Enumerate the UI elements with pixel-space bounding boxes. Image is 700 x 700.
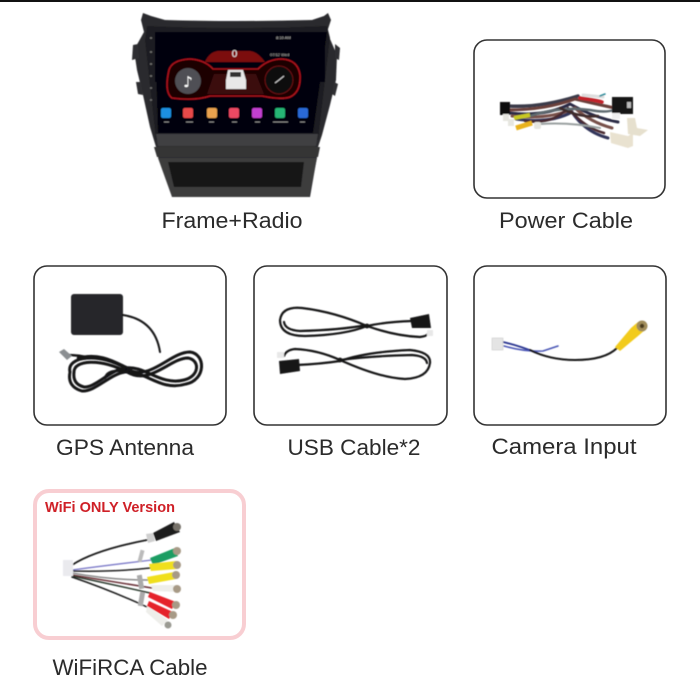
panel: USB cables: [254, 266, 447, 460]
USB connectors: [410, 314, 431, 328]
head unit image: [132, 13, 340, 197]
car icon: [226, 70, 246, 89]
panel: GPS antenna: [34, 266, 226, 460]
label: WiFi RCA cable: WiFiRCA Cable: [52, 655, 208, 680]
panel: frame and radio: [132, 13, 340, 233]
label: power cable: Power Cable: [499, 208, 633, 233]
white connectors: [610, 132, 633, 148]
top status bar text: 8:10 AM: [276, 35, 291, 40]
right black connector: [612, 97, 633, 114]
audio jack: [146, 533, 155, 543]
label: GPS antenna: GPS Antenna: [56, 435, 195, 460]
camera cable image: [492, 320, 648, 360]
top edge bar: [0, 0, 700, 2]
panel: WiFi RCA cable: [35, 491, 244, 680]
RCA plugs: [150, 548, 178, 565]
wiring harness image: [500, 94, 648, 148]
panel: power cable: [474, 40, 665, 233]
label: USB cable x2: USB Cable*2: [288, 435, 420, 460]
speed readout: 07/12 Wed: [270, 52, 289, 57]
antenna plug: [59, 349, 72, 360]
white connector: [492, 338, 503, 350]
side button dots: [150, 38, 152, 100]
panel: camera input: [474, 266, 666, 459]
screen: [150, 32, 327, 133]
yellow RCA plug: [615, 322, 645, 351]
WiFi only badge text: WiFi ONLY Version: [45, 499, 175, 516]
RCA plugs: [514, 115, 530, 118]
dashboard ring: ♪: [183, 73, 193, 91]
left black connector: [500, 102, 510, 115]
label: camera input: Camera Input: [492, 434, 636, 459]
speed readout: 0: [232, 49, 238, 60]
dashboard ring: [167, 59, 300, 99]
label: frame+radio: Frame+Radio: [162, 208, 302, 233]
speed readout: [205, 49, 289, 62]
white multi-pin connector: [63, 560, 73, 576]
RCA cable image: [63, 522, 181, 628]
app icons: [161, 108, 308, 122]
USB cables image: [277, 308, 433, 379]
GPS antenna image: [59, 294, 202, 391]
